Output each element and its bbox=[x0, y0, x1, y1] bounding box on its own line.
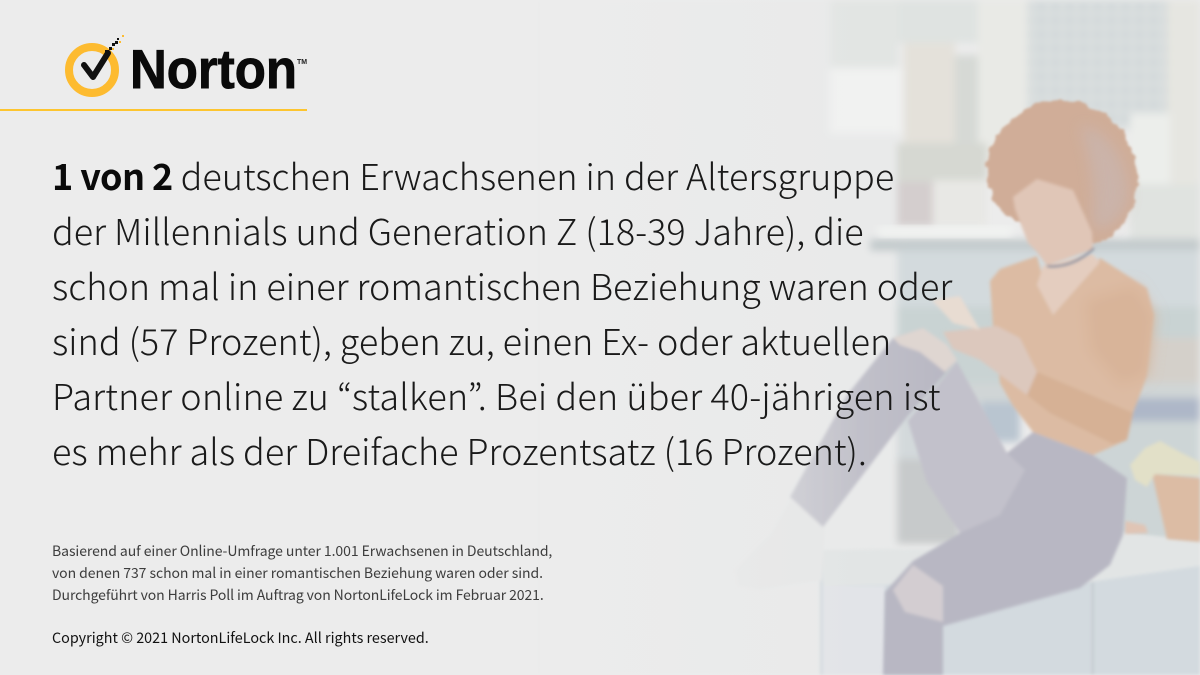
main statement text: 1 von 2 deutschen Erwachsenen in der Altersgruppe bbox=[52, 149, 894, 201]
choker bbox=[1047, 248, 1094, 266]
city skyline bbox=[540, 0, 1200, 675]
skyline bright band bbox=[877, 226, 1013, 237]
main statement text: es mehr als der Dreifache Prozentsatz (16 Prozent). bbox=[52, 424, 867, 476]
lower thigh highlight bbox=[908, 362, 1025, 533]
white fade overlay bbox=[540, 0, 860, 675]
Norton logo bbox=[65, 35, 307, 100]
main statement text: schon mal in einer romantischen Beziehung waren oder bbox=[52, 259, 952, 311]
ripped knee bbox=[893, 328, 957, 372]
rear leg and hips bbox=[883, 362, 1127, 675]
ripped knee on rear leg bbox=[893, 565, 943, 622]
survey footnote: von denen 737 schon mal in einer romantischen Beziehung waren oder sind. bbox=[52, 563, 543, 583]
survey footnote bbox=[52, 541, 552, 605]
face and neck bbox=[1013, 179, 1094, 266]
trademark: TM bbox=[297, 59, 307, 66]
logo checkmark bbox=[84, 53, 108, 77]
survey footnote: Durchgeführt von Harris Poll im Auftrag von NortonLifeLock im Februar 2021. bbox=[52, 585, 544, 605]
chest skin bbox=[1037, 254, 1100, 315]
woman figure bbox=[735, 254, 1154, 675]
logo underline bbox=[0, 109, 307, 111]
hair shade bbox=[1080, 125, 1128, 229]
potted plant bbox=[1125, 441, 1200, 542]
raised shin bbox=[790, 328, 957, 527]
logo ring bbox=[69, 47, 115, 93]
copyright: Copyright © 2021 NortonLifeLock Inc. All rights reserved. bbox=[52, 627, 429, 648]
main statement text bbox=[52, 149, 952, 476]
forearm sleeve bbox=[1027, 372, 1133, 444]
sleeve shade bbox=[1085, 285, 1154, 385]
pixel trail bbox=[105, 35, 124, 54]
wordmark: Norton bbox=[130, 38, 297, 100]
main statement text: der Millennials und Generation Z (18-39 Jahre), die bbox=[52, 204, 864, 256]
rooftop ledge bbox=[820, 532, 1200, 675]
torso top bbox=[990, 256, 1154, 455]
main statement text: sind (57 Prozent), geben zu, einen Ex- oder aktuellen bbox=[52, 314, 891, 366]
phone bbox=[932, 296, 980, 330]
shoe bbox=[735, 500, 825, 590]
survey footnote: Basierend auf einer Online-Umfrage unter 1.001 Erwachsenen in Deutschland, bbox=[52, 541, 552, 561]
main statement text: Partner online zu “stalken”. Bei den über 40-jährigen ist bbox=[52, 369, 941, 421]
hair bbox=[987, 101, 1137, 243]
hand bbox=[943, 326, 1037, 395]
